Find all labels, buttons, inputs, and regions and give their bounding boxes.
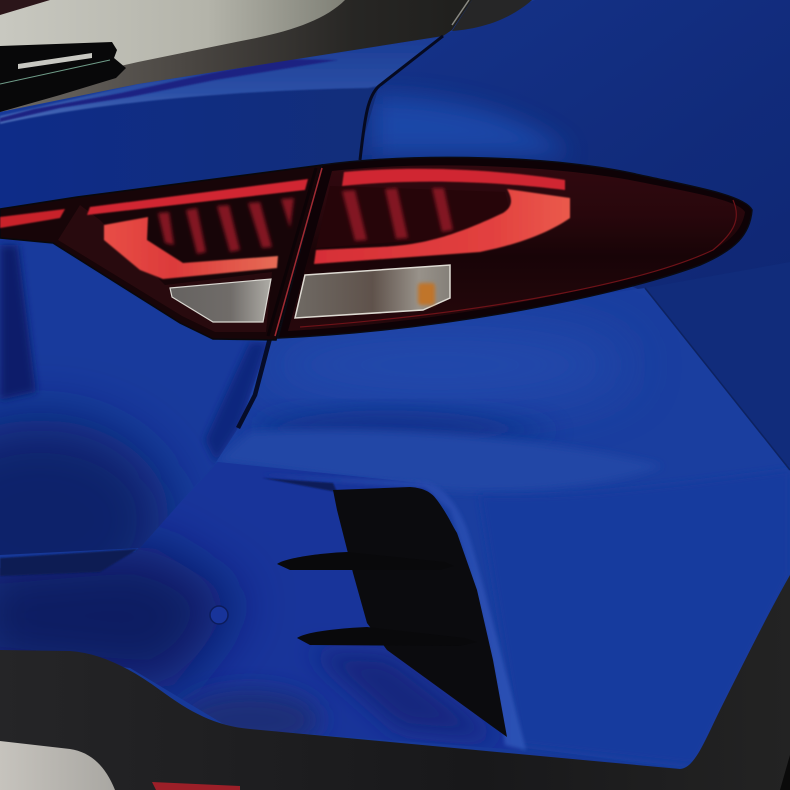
reverse lamp right	[295, 265, 450, 318]
lamp housing left	[0, 165, 322, 340]
vent upper fin	[277, 552, 454, 570]
top left corner reflection	[0, 0, 50, 15]
inner red edge line	[300, 200, 736, 327]
quarter panel edge line	[645, 288, 790, 470]
tail light: right section on quarter panel	[278, 157, 752, 338]
panel: upper right quarter panel	[360, 0, 790, 300]
shadow: beneath vent	[310, 650, 500, 740]
tailgate lower edge slot	[0, 549, 138, 576]
vent grille	[333, 487, 507, 737]
lamp divider	[275, 168, 322, 336]
led strip top left	[87, 179, 308, 215]
led fins left	[158, 198, 294, 254]
right wheel arch shadow	[780, 755, 790, 790]
panel: bumper left	[0, 462, 504, 748]
lamp lens right	[288, 165, 745, 331]
amber indicator	[418, 283, 435, 305]
spoiler edge highlight	[452, 0, 469, 25]
led strip top right	[342, 169, 565, 190]
red reflector	[152, 782, 240, 790]
lamp lens lower band	[58, 205, 272, 332]
shadow: left bumper dark	[0, 545, 240, 690]
window glass	[0, 0, 472, 112]
dark tinted glass band	[0, 0, 472, 112]
led strip outer left	[0, 209, 65, 228]
rear spoiler tip	[452, 0, 532, 31]
rear wiper	[0, 42, 126, 112]
panel: upper left boot lid	[0, 36, 443, 212]
vent lower fin	[297, 627, 477, 646]
light sky reflection	[0, 0, 345, 90]
lamp housing right	[278, 157, 752, 338]
shadow: door lower left	[0, 396, 188, 555]
highlight: above bumper crease	[250, 325, 630, 405]
shadow: lower left purple tone	[188, 682, 324, 734]
highlight: boot lid shoulder	[0, 36, 443, 124]
panel seam upper	[360, 36, 443, 160]
reflection: dark sliver on boot lid	[0, 59, 338, 122]
bumper vent lip highlight	[262, 474, 526, 750]
panel: rear door / tailgate lower	[0, 241, 266, 555]
reverse lamp left	[170, 279, 271, 322]
panel: lower quarter panel	[216, 288, 790, 770]
parking sensor	[210, 606, 228, 624]
led fins right	[342, 188, 453, 241]
panel: far right quarter shadow	[645, 262, 790, 470]
highlight: quarter panel crease	[372, 96, 570, 155]
bumper vent: recess	[262, 478, 507, 737]
vent top shadow	[262, 478, 337, 492]
silver skid plate	[0, 741, 115, 790]
lamp top divider shadow	[268, 168, 316, 336]
lamp dark interior right	[316, 186, 510, 248]
panel seam lower	[238, 338, 270, 428]
shadow: wheel arch dip	[260, 411, 560, 440]
led hook right	[314, 189, 570, 264]
tail light: left section on tailgate	[0, 165, 322, 340]
panel: bumper right shading	[480, 470, 790, 765]
shadow: door right edge	[205, 342, 268, 462]
black lower bumper cladding	[0, 575, 790, 790]
shadow: tailgate recess	[0, 245, 36, 400]
highlight: bumper shoulder	[218, 430, 662, 492]
led hook left	[104, 217, 278, 279]
